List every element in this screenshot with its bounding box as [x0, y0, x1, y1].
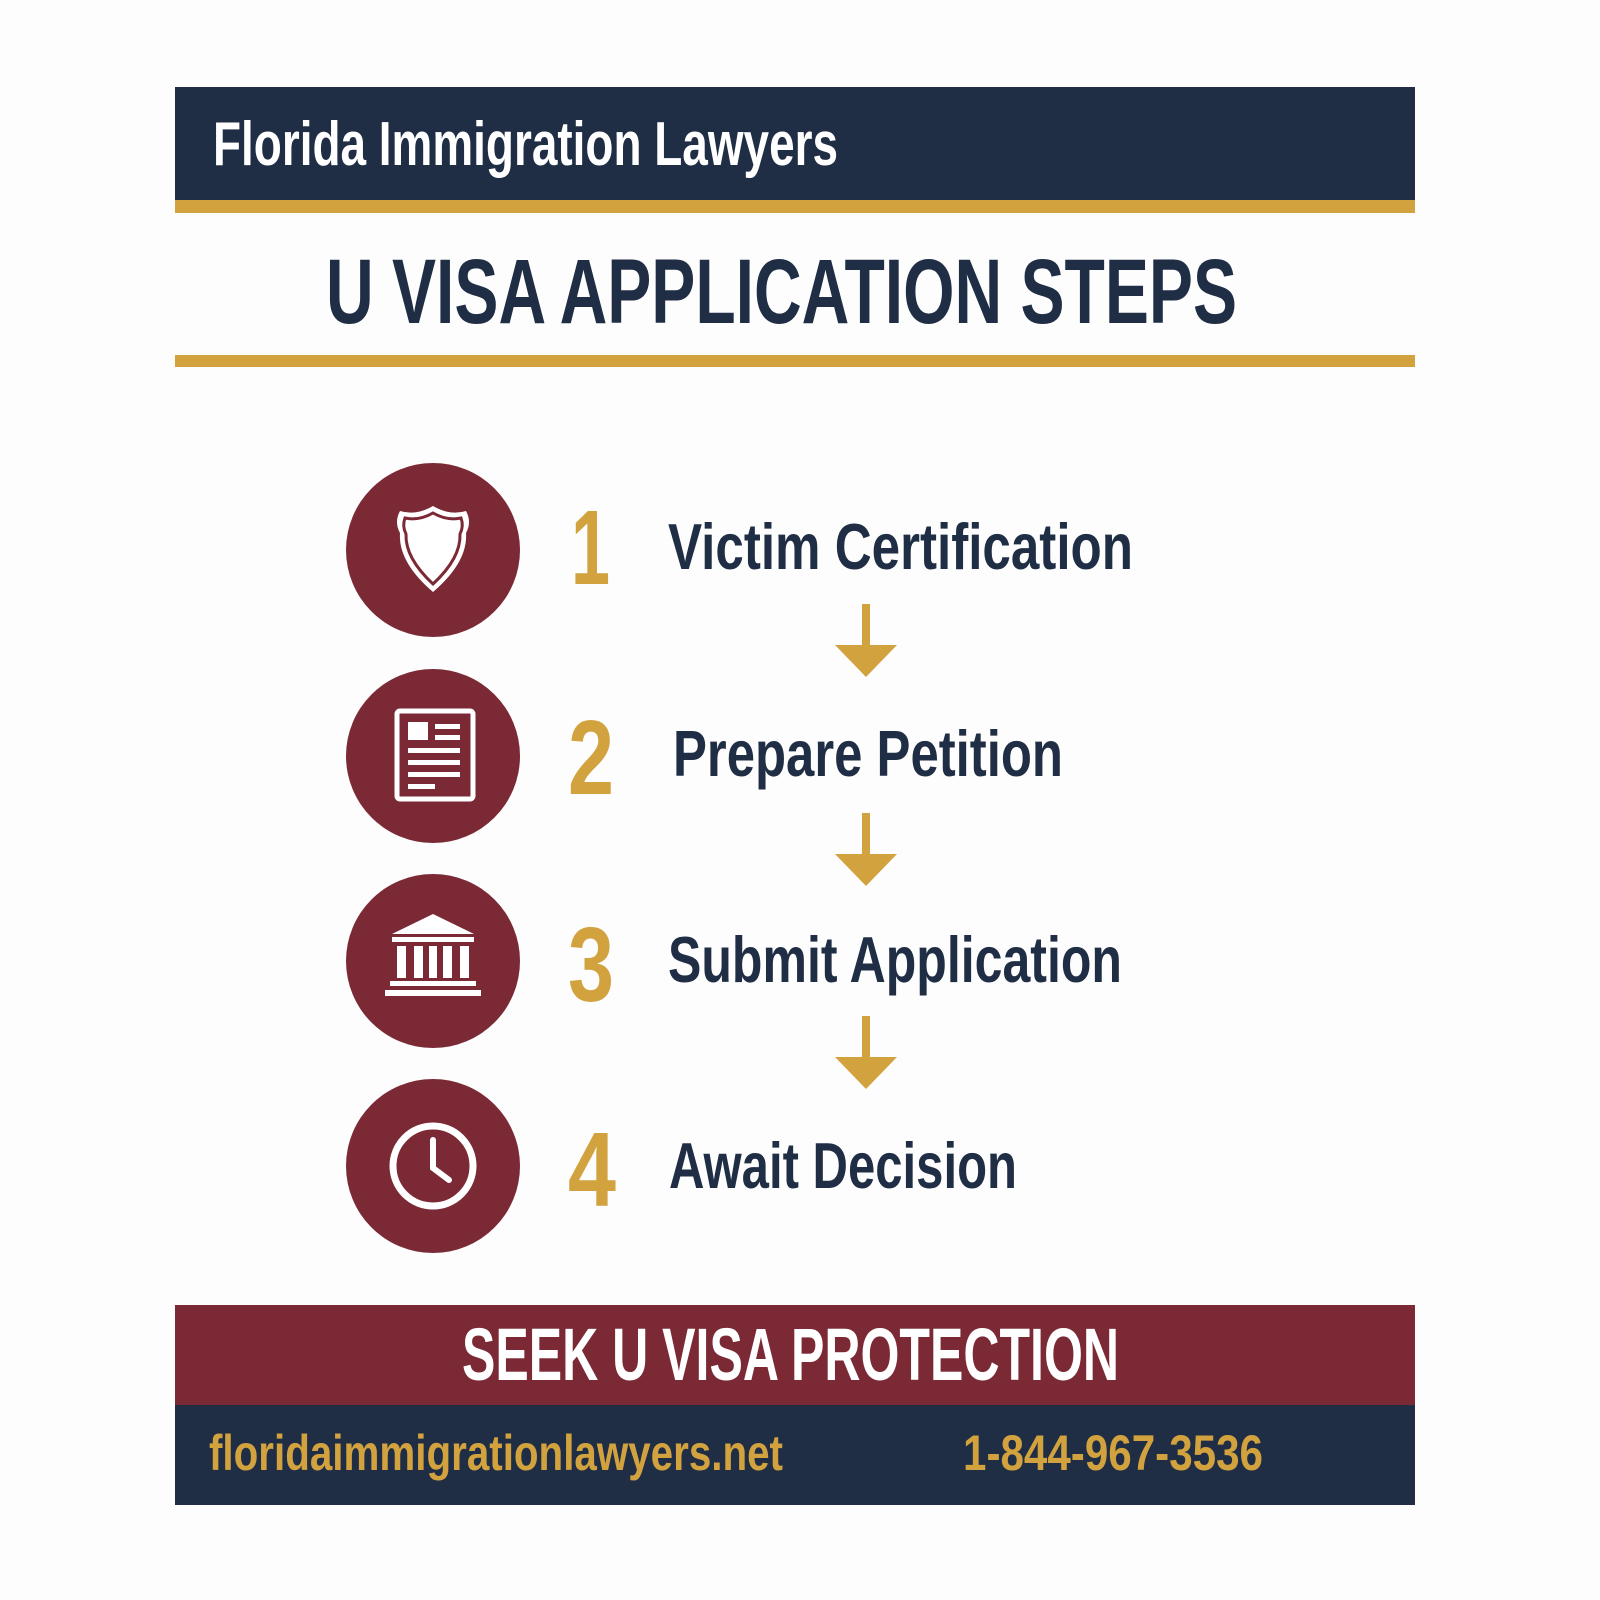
icon: courthouse — [385, 914, 481, 996]
step 4: await decision: 4 — [568, 1111, 616, 1229]
step 3: submit application: 3 — [568, 906, 614, 1024]
icon: document — [397, 711, 473, 799]
step 2: prepare petition — [346, 669, 1063, 843]
arrow 3 — [835, 1016, 897, 1089]
step 2: prepare petition: Prepare Petition — [673, 717, 1063, 790]
step 1: victim certification — [346, 463, 1133, 637]
step 1: victim certification: Victim Certification — [668, 510, 1133, 583]
step 4: await decision — [346, 1079, 1017, 1253]
icon: shield — [397, 506, 469, 592]
step 3: submit application: Submit Application — [668, 923, 1122, 996]
step 2: prepare petition: 2 — [568, 699, 614, 817]
icon: clock — [393, 1126, 473, 1206]
step 3: submit application — [346, 874, 1122, 1048]
call-to-action banner — [175, 1305, 1415, 1405]
footer contact bar: floridaimmigrationlawyers.net — [209, 1425, 783, 1481]
arrow 1 — [835, 604, 897, 677]
call-to-action banner: SEEK U VISA PROTECTION — [462, 1313, 1119, 1396]
footer contact bar: 1-844-967-3536 — [963, 1425, 1263, 1481]
step 1: victim certification: 1 — [571, 489, 610, 607]
step 4: await decision: Await Decision — [669, 1129, 1017, 1202]
arrow 2 — [835, 813, 897, 886]
title: U VISA APPLICATION STEPS — [326, 241, 1237, 343]
header bar: Florida Immigration Lawyers — [213, 110, 838, 179]
header bar — [175, 87, 1415, 213]
footer contact bar — [175, 1405, 1415, 1505]
